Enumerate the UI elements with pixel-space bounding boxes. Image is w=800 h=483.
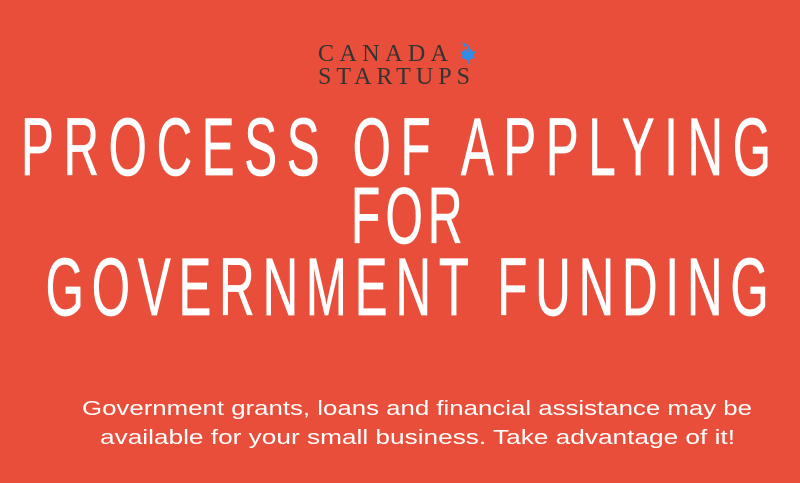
title: FOR <box>351 170 463 260</box>
logo text: canada: CANADA <box>318 41 449 67</box>
icon: maple leaf <box>460 42 476 64</box>
subtitle: Government grants, loans and financial assistance may be <box>82 398 752 420</box>
title <box>21 102 771 333</box>
logo text: startups: STARTUPS <box>318 64 470 90</box>
title: GOVERNMENT FUNDING <box>46 242 769 333</box>
title: PROCESS OF APPLYING <box>21 102 771 193</box>
subtitle: available for your small business. Take advantage of it! <box>100 427 735 449</box>
logo <box>318 41 476 90</box>
subtitle <box>82 398 752 449</box>
